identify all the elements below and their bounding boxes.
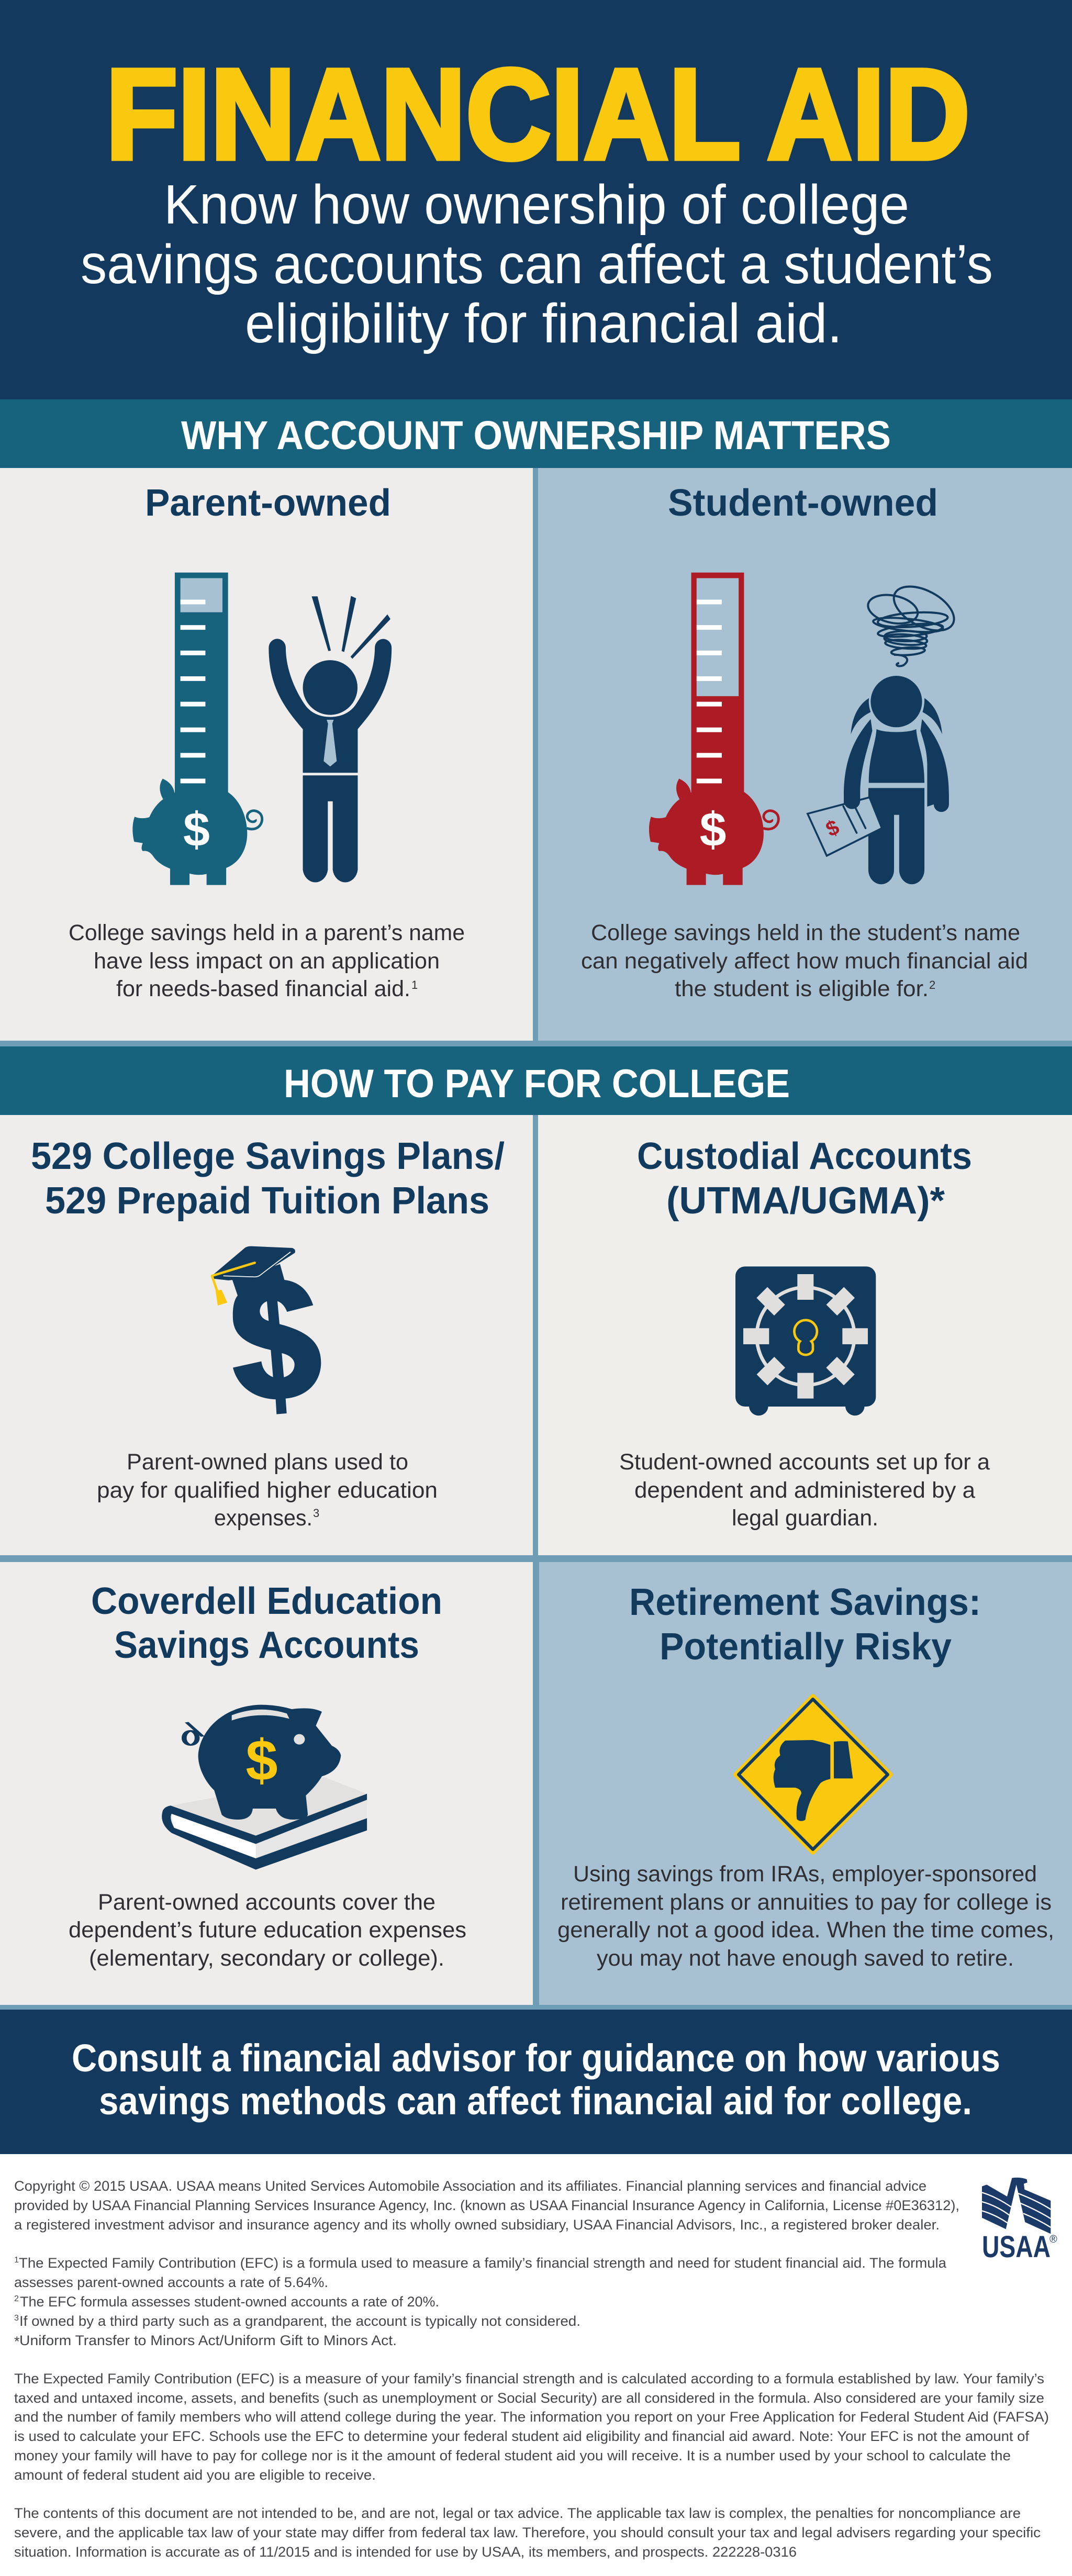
heading: custodial accounts: Custodial Accounts — [637, 1135, 972, 1177]
description: parent-owned — [69, 920, 465, 1001]
description: student-owned: can negatively affect how much financial aid — [581, 949, 1028, 974]
subtitle — [81, 174, 993, 354]
logo: USAA — [982, 2178, 1057, 2264]
heading: 529 plans — [31, 1135, 505, 1222]
footer: EFC explanation: money your family will have to pay for college nor is it the amount of federal student aid you will receive. It is a number used by your school to calculate the — [14, 2448, 1011, 2463]
heading: parent-owned: Parent-owned — [145, 482, 391, 524]
description: 529 plans: expenses. — [214, 1506, 312, 1531]
footer: footnotes: 3 — [14, 2314, 19, 2323]
heading: 529 plans: 529 College Savings Plans/ — [31, 1135, 505, 1177]
heading: coverdell — [91, 1580, 442, 1666]
footer: legal disclaimer: The contents of this document are not intended to be, and are not, legal or tax advice. The applicable tax law is complex, the penalties for noncompliance are — [14, 2505, 1021, 2521]
footer: copyright text: Copyright © 2015 USAA. USAA means United Services Automobile Association and its affiliates. Financial planning services and financial advice — [14, 2178, 926, 2194]
section band: why account ownership matters: WHY ACCOUNT OWNERSHIP MATTERS — [181, 413, 891, 458]
footer: footnotes: Uniform Transfer to Minors Act/Uniform Gift to Minors Act. — [19, 2333, 397, 2348]
callout: consult a financial advisor: Consult a financial advisor for guidance on how various — [72, 2036, 1000, 2080]
footer: footnotes: * — [14, 2334, 20, 2349]
description: custodial accounts: dependent and administered by a — [634, 1478, 975, 1503]
description: student-owned: 2 — [929, 978, 935, 991]
description: 529 plans: Parent-owned plans used to — [127, 1449, 408, 1475]
callout: consult a financial advisor: savings methods can affect financial aid for college. — [99, 2079, 972, 2123]
description: student-owned — [581, 920, 1028, 1001]
panel: student-owned — [533, 468, 1072, 1041]
subtitle: Know how ownership of college — [164, 174, 909, 236]
heading: retirement savings: Retirement Savings: — [629, 1581, 981, 1623]
heading: coverdell: Savings Accounts — [114, 1624, 419, 1666]
description: custodial accounts — [619, 1449, 990, 1531]
subtitle: savings accounts can affect a student’s — [81, 233, 993, 295]
heading: retirement savings — [629, 1581, 981, 1668]
icon: parent thermometer piggy bank — [132, 573, 262, 885]
heading: retirement savings: Potentially Risky — [660, 1626, 952, 1668]
icon: safe — [735, 1266, 876, 1415]
section band: why account ownership matters — [0, 399, 1072, 468]
footer: legal disclaimer: severe, and the applicable tax law of your state may differ from federal tax law. Therefore, you should consult your tax and legal advisers regarding your specific — [14, 2525, 1041, 2540]
description: student-owned: the student is eligible for. — [675, 976, 929, 1001]
divider band — [0, 1555, 1072, 1562]
logo: USAA: ® — [1049, 2234, 1057, 2245]
heading: 529 plans: 529 Prepaid Tuition Plans — [45, 1180, 489, 1222]
footer: EFC explanation: amount of federal student aid you are eligible to receive. — [14, 2467, 376, 2483]
description: retirement savings: Using savings from IRAs, employer-sponsored — [573, 1861, 1037, 1887]
description: parent-owned: for needs-based financial aid. — [116, 976, 410, 1001]
icon: paper with dollar sign: $ — [822, 815, 843, 841]
title: FINANCIAL AID — [106, 42, 970, 186]
description: 529 plans: pay for qualified higher education — [97, 1478, 438, 1503]
description: 529 plans — [97, 1449, 438, 1531]
description: coverdell — [69, 1890, 466, 1971]
icon: student thermometer piggy bank: $ — [700, 803, 726, 856]
icon: dollar sign with graduation cap — [211, 1246, 321, 1414]
footer: footnotes: 2 — [14, 2294, 19, 2303]
heading: coverdell: Coverdell Education — [91, 1580, 442, 1622]
description: student-owned: College savings held in the student’s name — [591, 920, 1020, 945]
panel: parent-owned — [0, 468, 533, 1041]
heading: custodial accounts: (UTMA/UGMA)* — [666, 1180, 945, 1222]
header panel — [0, 0, 1072, 399]
footer: legal disclaimer: situation. Information is accurate as of 11/2015 and is intended for use by USAA, its members, and prospects. 222228-0316 — [14, 2544, 797, 2560]
icon: piggy bank on book: $ — [245, 1729, 278, 1793]
footer: copyright text: a registered investment advisor and insurance agency and its wholly owned subsidiary, USAA Financial Advisors, Inc., a registered broker dealer. — [14, 2217, 940, 2233]
icon: parent thermometer piggy bank: $ — [183, 803, 210, 856]
description: retirement savings: you may not have enough saved to retire. — [597, 1946, 1014, 1971]
footer: footnotes: assesses parent-owned accounts a rate of 5.64%. — [14, 2274, 328, 2290]
panel: retirement savings — [533, 1562, 1072, 2005]
description: coverdell: dependent’s future education expenses — [69, 1917, 466, 1943]
footer: EFC explanation: The Expected Family Contribution (EFC) is a measure of your family’s financial strength and is calculated according to a formula established by law. Your family’s — [14, 2371, 1044, 2387]
subtitle: eligibility for financial aid. — [245, 293, 842, 354]
footer: copyright text — [14, 2178, 959, 2233]
icon: piggy bank on book — [162, 1705, 367, 1870]
logo: USAA: USAA — [982, 2230, 1051, 2264]
footer: footnotes — [14, 2255, 947, 2349]
description: 529 plans: 3 — [313, 1507, 319, 1520]
icon: businessman with raised arms — [269, 596, 392, 882]
footer: EFC explanation: and the number of family members who will attend college during the year. The information you report on your Free Application for Federal Student Aid (FAFSA) — [14, 2409, 1049, 2425]
description: retirement savings — [557, 1861, 1054, 1971]
footer: legal disclaimer — [14, 2505, 1041, 2560]
description: parent-owned: 1 — [411, 978, 418, 991]
description: retirement savings: retirement plans or annuities to pay for college is — [561, 1890, 1052, 1915]
footer: EFC explanation: taxed and untaxed income, assets, and benefits (such as unemployment or Social Security) are all considered in the formula. Also considered are your family size — [14, 2390, 1044, 2406]
footer: footnotes: 1 — [14, 2256, 19, 2265]
description: custodial accounts: Student-owned accounts set up for a — [619, 1449, 990, 1475]
section band: how to pay for college — [0, 1046, 1072, 1115]
icon: warning sign with thumbs down — [735, 1696, 891, 1853]
icon: scribble cloud — [865, 577, 961, 666]
panel: coverdell — [0, 1562, 533, 2005]
icon: student thermometer piggy bank — [649, 573, 778, 885]
callout: consult a financial advisor — [0, 2010, 1072, 2154]
description: coverdell: Parent-owned accounts cover the — [98, 1890, 436, 1915]
description: custodial accounts: legal guardian. — [732, 1506, 878, 1531]
panel: custodial accounts — [533, 1115, 1072, 1555]
divider band — [0, 1041, 1072, 1046]
icon: paper with dollar sign — [808, 793, 882, 856]
footer: footnotes: If owned by a third party such as a grandparent, the account is typically not considered. — [19, 2313, 580, 2329]
section band: how to pay for college: HOW TO PAY FOR COLLEGE — [284, 1062, 790, 1106]
footer: EFC explanation: is used to calculate your EFC. Schools use the EFC to determine your federal student aid eligibility and financial aid award. Note: Your EFC is not the amount of — [14, 2428, 1029, 2444]
description: coverdell: (elementary, secondary or college). — [89, 1946, 444, 1971]
heading: student-owned: Student-owned — [668, 482, 938, 524]
panel: 529 plans — [0, 1115, 533, 1555]
icon: stressed student with backpack — [808, 577, 961, 884]
footer: footnotes: The EFC formula assesses student-owned accounts a rate of 20%. — [20, 2294, 439, 2310]
footer: footnotes: The Expected Family Contribution (EFC) is a formula used to measure a family’s financial strength and need for student financial aid. The formula — [19, 2255, 947, 2271]
divider band — [0, 2005, 1072, 2010]
footer: copyright text: provided by USAA Financial Planning Services Insurance Agency, Inc. (known as USAA Financial Insurance Agency in California, License #0E36312), — [14, 2198, 959, 2213]
footer: EFC explanation — [14, 2371, 1049, 2483]
heading: custodial accounts — [637, 1135, 972, 1222]
description: retirement savings: generally not a good idea. When the time comes, — [557, 1917, 1054, 1943]
description: parent-owned: College savings held in a parent’s name — [69, 920, 465, 945]
description: parent-owned: have less impact on an application — [94, 949, 440, 974]
